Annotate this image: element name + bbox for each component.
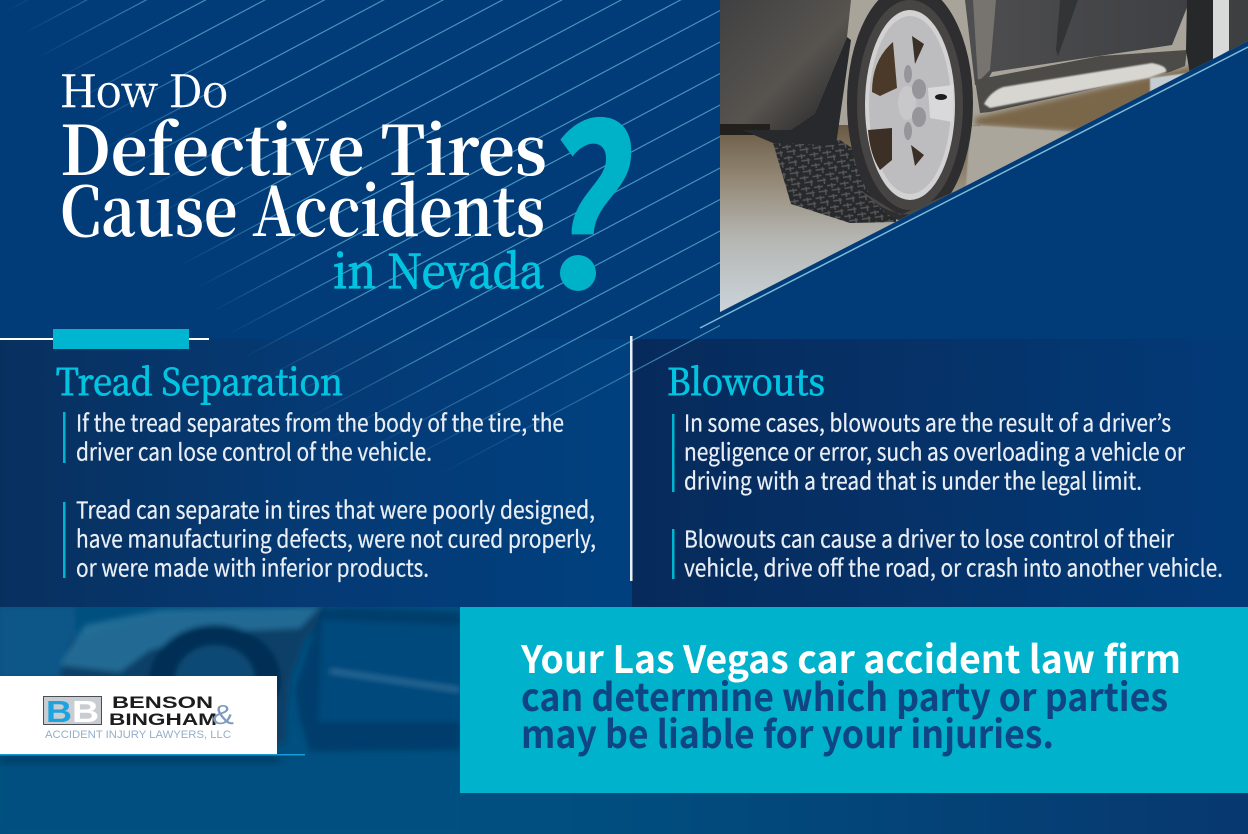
- callout: Your Las Vegas car accident law firm: [520, 629, 1181, 684]
- tire tread: [773, 140, 900, 223]
- panel: tread separation background: [0, 339, 632, 607]
- background image: wrecked car: [0, 607, 460, 834]
- sill: [975, 50, 1187, 113]
- section: blowouts: [667, 352, 1223, 584]
- rim: [865, 10, 955, 200]
- icon: BB mark: [44, 694, 102, 729]
- photo: flat tire on car: [720, 0, 1248, 315]
- heading: Tread Separation: [56, 352, 343, 406]
- logo: ACCIDENT INJURY LAWYERS, LLC: [45, 729, 231, 741]
- title: [60, 55, 547, 302]
- text block 1: driver can lose control of the vehicle.: [76, 434, 432, 468]
- ground: [720, 0, 1248, 315]
- logo: [0, 676, 305, 762]
- text block 2: [672, 520, 1223, 584]
- accent bar: tread separation: [0, 329, 209, 349]
- title: in Nevada: [333, 235, 544, 302]
- text block 1: [672, 404, 1186, 496]
- tire: [847, 0, 973, 222]
- text block 2: Tread can separate in tires that were poorly designed,: [76, 492, 595, 526]
- text block 2: [63, 492, 596, 584]
- callout: may be liable for your injuries.: [521, 704, 1054, 759]
- title: Cause Accidents: [60, 159, 545, 256]
- icon: question mark: ?: [526, 31, 655, 357]
- callout: [460, 607, 1248, 793]
- icon: BB mark: B: [72, 694, 99, 729]
- panel: blowouts background: [632, 339, 1248, 607]
- text block 1: negligence or error, such as overloading a vehicle or: [684, 434, 1186, 468]
- logo: BINGHAM: [109, 711, 217, 729]
- photo edge line: [700, 47, 1248, 328]
- divider: [630, 336, 632, 581]
- logo: &: [212, 699, 234, 730]
- text block 2: Blowouts can cause a driver to lose control of their: [684, 520, 1175, 554]
- mud flap: [742, 37, 851, 145]
- section: tread separation: [56, 352, 596, 584]
- text block 2: or were made with inferior products.: [76, 550, 429, 584]
- diagonal stripe pattern: [16, 0, 720, 462]
- text block 1: [63, 404, 564, 468]
- heading: Blowouts: [667, 352, 825, 406]
- rear wheel: [1186, 0, 1215, 75]
- logo: BENSON: [112, 694, 213, 712]
- car side panels: [965, 0, 1190, 85]
- car body: [720, 0, 851, 130]
- title: How Do: [60, 55, 228, 120]
- text block 1: In some cases, blowouts are the result of a driver’s: [684, 404, 1171, 438]
- icon: BB mark: B: [46, 694, 72, 729]
- text block 1: driving with a tread that is under the legal limit.: [684, 462, 1142, 496]
- text block 1: If the tread separates from the body of the tire, the: [76, 404, 564, 438]
- title: Defective Tires: [60, 98, 547, 195]
- text block 2: have manufacturing defects, were not cured properly,: [76, 520, 596, 554]
- icon: question mark: [560, 116, 632, 291]
- callout: can determine which party or parties: [521, 667, 1168, 722]
